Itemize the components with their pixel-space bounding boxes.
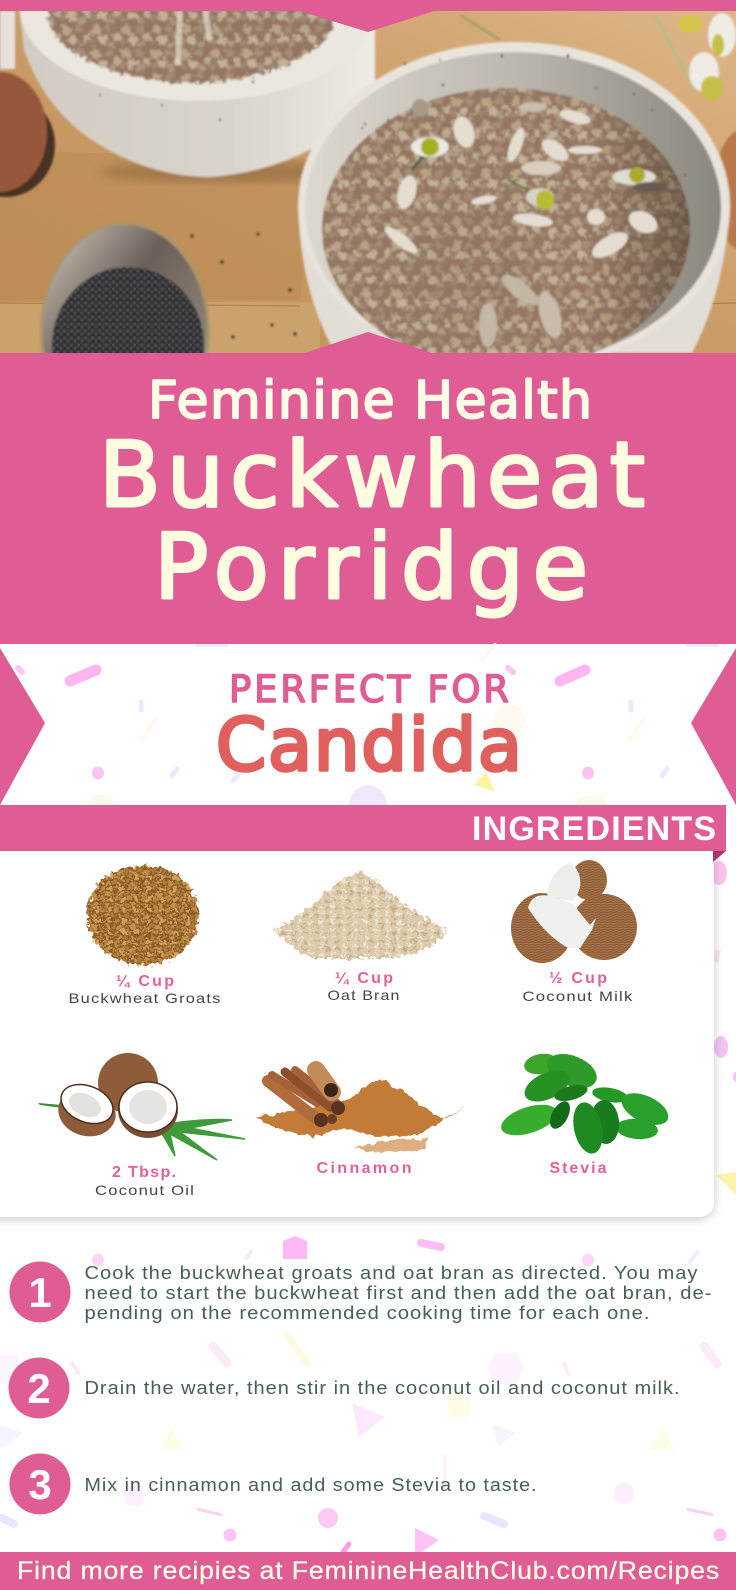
footer text: Find more recipies at FeminineHealthClub.com/Recipes bbox=[17, 1557, 720, 1585]
amount: ¼ Cup bbox=[335, 970, 393, 987]
step 3 bbox=[10, 1454, 538, 1514]
photo: bowls of buckwheat porridge bbox=[0, 11, 736, 353]
bowl speckles bbox=[99, 54, 686, 339]
step 3 text: Mix in cinnamon and add some Stevia to taste. bbox=[84, 1475, 538, 1495]
small bowl bbox=[100, 161, 360, 183]
heading: Buckwheat: Buckwheat bbox=[99, 423, 645, 528]
confetti right of card bbox=[711, 861, 736, 1195]
title panel bbox=[0, 332, 736, 644]
ingredient: coconut oil bbox=[38, 1053, 245, 1198]
image: stevia leaves bbox=[497, 1047, 673, 1156]
number badge 2 bbox=[8, 1358, 70, 1418]
spoon with chia bbox=[39, 222, 211, 353]
seeds bbox=[382, 99, 661, 347]
image: oat pile bbox=[275, 872, 446, 959]
subheading: perfect for: PERFECT FOR bbox=[229, 668, 509, 711]
porridge bbox=[320, 87, 691, 353]
ribbon fold bbox=[713, 851, 726, 862]
ribbon tail left bbox=[0, 648, 45, 805]
heading: Candida: Candida bbox=[216, 703, 522, 787]
number badge 2: 2 bbox=[27, 1365, 51, 1412]
ingredients header bar bbox=[0, 805, 726, 862]
name: Cinnamon bbox=[316, 1160, 412, 1177]
ingredient: oat bran bbox=[275, 872, 446, 1003]
ribbon tail right bbox=[691, 648, 736, 805]
name: Buckwheat Groats bbox=[68, 990, 222, 1006]
ingredient: cinnamon bbox=[255, 1070, 467, 1177]
amount: ¼ Cup bbox=[116, 973, 174, 990]
footer bar bbox=[0, 1552, 736, 1590]
top pink band with notch bbox=[0, 0, 736, 32]
ingredients card bbox=[0, 840, 714, 1217]
step 2 text: Drain the water, then stir in the coconut oil and coconut milk. bbox=[84, 1378, 680, 1398]
amount: 2 Tbsp. bbox=[112, 1164, 176, 1181]
number badge 3: 3 bbox=[28, 1461, 52, 1508]
name: Coconut Milk bbox=[522, 988, 634, 1004]
step 2 bbox=[8, 1358, 680, 1418]
step 1 text: Cook the buckwheat groats and oat bran as directed. You may bbox=[84, 1263, 698, 1283]
image: coconuts and palm leaves bbox=[38, 1053, 245, 1160]
ingredient: coconut milk bbox=[511, 860, 637, 1004]
name: Oat Bran bbox=[328, 987, 400, 1003]
ingredient: stevia bbox=[497, 1047, 673, 1177]
image: cinnamon sticks and powder bbox=[255, 1070, 467, 1153]
number badge 3 bbox=[10, 1454, 70, 1514]
amount: ½ Cup bbox=[549, 970, 607, 987]
big bowl bbox=[298, 205, 730, 353]
number badge 1: 1 bbox=[28, 1269, 52, 1316]
name: Coconut Oil bbox=[95, 1182, 195, 1198]
image: coconut with milk bbox=[511, 860, 637, 963]
step 1 text: need to start the buckwheat first and then add the oat bran, de- bbox=[84, 1283, 712, 1303]
flowers top right bbox=[460, 15, 500, 40]
heading: Feminine Health: Feminine Health bbox=[148, 371, 592, 431]
left coconut bbox=[0, 113, 56, 198]
confetti background for steps bbox=[0, 1236, 726, 1552]
name: Stevia bbox=[550, 1160, 607, 1177]
ribbon: perfect for candida bbox=[0, 644, 736, 805]
number badge 1 bbox=[10, 1262, 70, 1322]
step 1 text bbox=[84, 1263, 712, 1323]
image: buckwheat pile bbox=[87, 865, 199, 965]
step 1 bbox=[10, 1262, 712, 1323]
step 1 text: pending on the recommended cooking time for each one. bbox=[84, 1303, 650, 1323]
chamomile flowers bbox=[410, 156, 424, 172]
heading: ingredients: INGREDIENTS bbox=[472, 810, 716, 848]
ingredient: buckwheat groats bbox=[68, 865, 222, 1006]
heading: Porridge: Porridge bbox=[154, 515, 588, 620]
